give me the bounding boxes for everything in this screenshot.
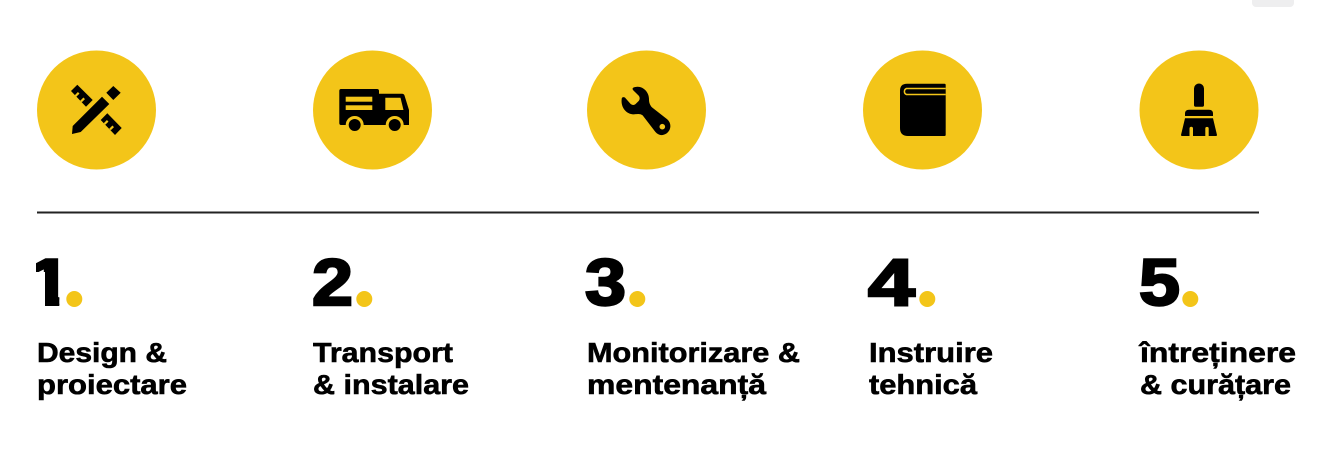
top-right grey tab — [1252, 0, 1294, 7]
number 1 — [36, 258, 82, 307]
step 2: transport — [312, 50, 469, 400]
label: design: proiectare — [37, 369, 187, 400]
number 2: 2 — [312, 245, 353, 319]
label: training: tehnică — [869, 369, 977, 400]
label: monitoring: mentenanță — [587, 369, 766, 400]
number 4: 4 — [868, 245, 915, 319]
label: design: Design & — [37, 337, 167, 368]
label: design — [37, 337, 187, 400]
number 3 — [585, 245, 645, 319]
label: transport: & instalare — [313, 369, 469, 400]
number 4 — [868, 245, 935, 319]
divider line — [37, 212, 1259, 214]
icon: truck — [313, 50, 432, 170]
label: transport: Transport — [313, 337, 453, 368]
number 5: 5 — [1139, 245, 1180, 319]
number 1: 1 — [26, 245, 72, 319]
icon: wrench — [587, 50, 706, 170]
number 2 — [312, 245, 372, 319]
label: cleaning — [1138, 337, 1296, 400]
icon: pencil and ruler — [37, 50, 156, 170]
step 5: cleaning — [1138, 50, 1296, 400]
icon: brush — [1140, 50, 1258, 170]
label: cleaning: întreținere — [1138, 337, 1296, 368]
number 3: 3 — [585, 245, 626, 319]
label: training: Instruire — [869, 337, 993, 368]
label: monitoring: Monitorizare & — [587, 337, 800, 368]
icon: book — [863, 50, 982, 170]
step 3: monitoring — [585, 50, 800, 400]
label: monitoring — [587, 337, 800, 400]
step 4: training — [863, 50, 993, 400]
number 5 — [1139, 245, 1198, 319]
step 1: design — [26, 50, 187, 400]
label: training — [869, 337, 993, 400]
label: cleaning: & curățare — [1140, 369, 1291, 400]
label: transport — [313, 337, 469, 400]
